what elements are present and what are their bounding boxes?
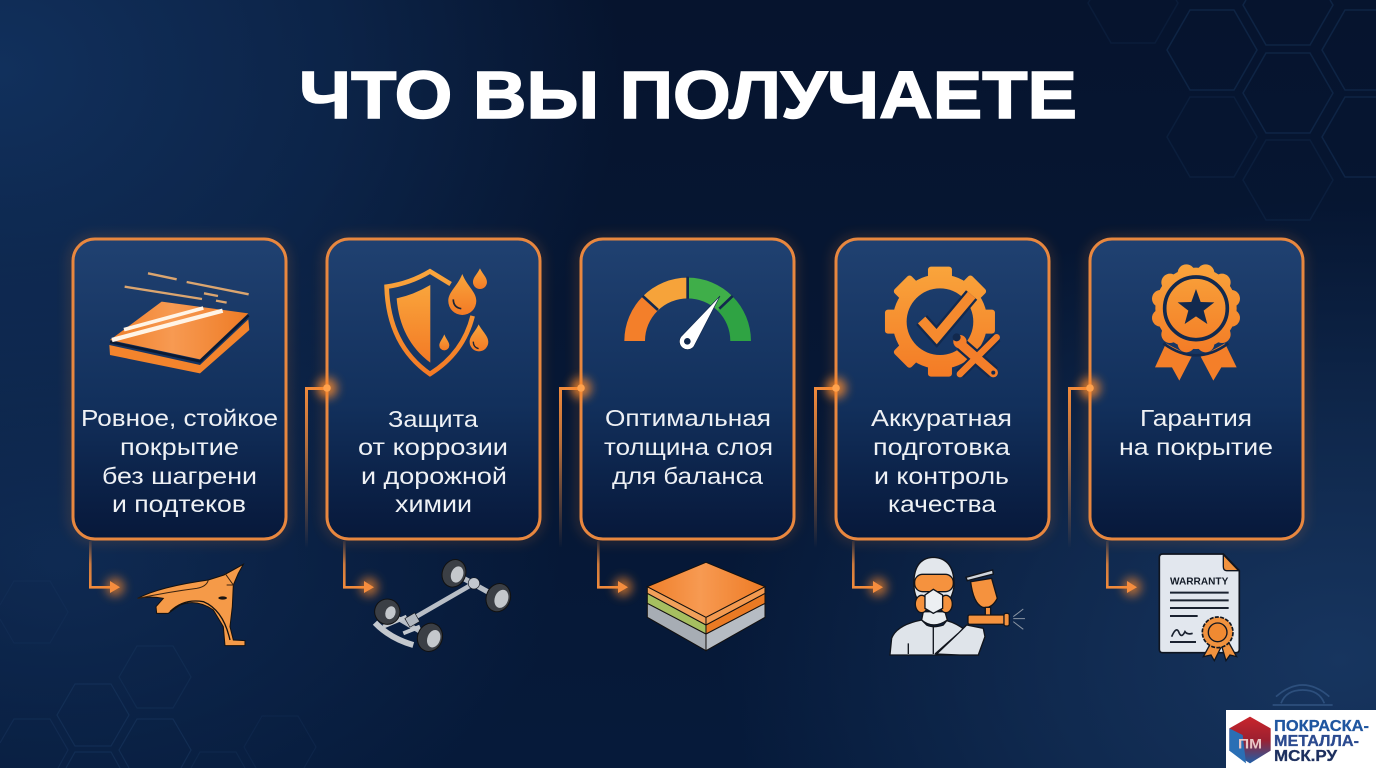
logo text — [1274, 718, 1369, 765]
card 2 text: и дорожной — [361, 463, 507, 489]
panel: card 5 guarantee — [1089, 239, 1303, 539]
card 4 text: качества — [888, 491, 996, 517]
logo hexagon mark: ПМ — [1238, 735, 1262, 751]
icon: glossy coated plate — [109, 273, 249, 373]
card 3 text: для баланса — [612, 463, 763, 489]
logo text: МСК.РУ — [1274, 748, 1338, 765]
card 5 text: Гарантия — [1140, 405, 1252, 431]
arrow: card 4 to painter — [852, 541, 887, 596]
connector: card 3 to card 4 — [814, 378, 846, 548]
icon: faint car watermark — [1273, 685, 1333, 705]
card 3 text: Оптимальная — [605, 405, 771, 431]
panel: card 3 thickness — [580, 239, 794, 539]
title: ЧТО ВЫ ПОЛУЧАЕТЕ — [299, 58, 1077, 133]
card 4 text: подготовка — [873, 434, 1010, 460]
arrow: card 2 to chassis — [343, 541, 378, 596]
logo block — [1226, 710, 1376, 768]
connector: card 1 to card 2 — [305, 378, 337, 548]
icon: thickness gauge — [635, 277, 741, 350]
icon: warranty document — [1159, 554, 1239, 661]
card 1 text: и подтеков — [112, 491, 246, 517]
card 1 text: покрытие — [120, 434, 239, 460]
card 4 text — [871, 405, 1012, 517]
card 4 text: и контроль — [874, 463, 1009, 489]
logo hexagon mark — [1229, 717, 1271, 763]
icon: shield with drops — [387, 268, 488, 374]
logo text: ПОКРАСКА- — [1274, 718, 1369, 735]
panel: card 2 protection — [326, 239, 540, 539]
arrow: card 1 to fender — [89, 541, 124, 596]
logo text: МЕТАЛЛА- — [1274, 733, 1359, 750]
icon: gear with check and tools — [883, 265, 997, 378]
card 5 text: на покрытие — [1119, 434, 1273, 460]
panel: card 4 preparation — [835, 239, 1049, 539]
arrow: card 5 to warranty — [1106, 541, 1141, 596]
connector: card 2 to card 3 — [559, 378, 591, 548]
card 1 text: без шагрени — [102, 463, 257, 489]
icon: coating layers — [647, 562, 765, 651]
card 5 text — [1119, 405, 1273, 460]
panel: card 1 coating — [72, 239, 286, 539]
card 3 text: толщина слоя — [604, 434, 773, 460]
icon: car chassis — [371, 556, 514, 655]
card 2 text: от коррозии — [358, 434, 508, 460]
icon: warranty document: WARRANTY — [1170, 576, 1229, 587]
background hexagon pattern: top right — [1088, 0, 1376, 220]
connector: card 4 to card 5 — [1068, 378, 1100, 548]
card 3 text — [604, 405, 773, 489]
icon: painter with spray gun — [890, 557, 1025, 655]
background hexagon pattern: bottom left — [0, 581, 316, 768]
card 4 text: Аккуратная — [871, 405, 1012, 431]
icon: car fender — [138, 564, 245, 646]
card 1 text: Ровное, стойкое — [81, 405, 278, 431]
card 2 text: Защита — [388, 406, 478, 432]
icon: medal with star — [1152, 264, 1240, 380]
card 1 text — [81, 405, 278, 517]
card 2 text: химии — [395, 491, 472, 517]
card 2 text — [358, 406, 508, 517]
arrow: card 3 to layers — [597, 541, 632, 596]
